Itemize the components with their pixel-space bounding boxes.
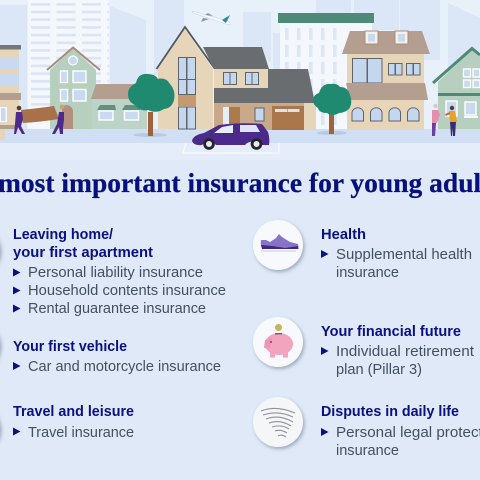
icon: piggy bank (253, 317, 303, 367)
list: disputes item: insurance (336, 443, 399, 459)
heading: leaving home (13, 226, 153, 261)
tree left (128, 74, 174, 137)
list: leaving home items: Personal liability insurance (28, 265, 203, 281)
illustration: street scene (0, 0, 480, 160)
tree right (313, 84, 351, 135)
list: leaving home items: Rental guarantee insurance (28, 301, 206, 317)
list: financial item (321, 344, 474, 378)
heading: leaving home: Leaving home/ (13, 226, 114, 243)
block: financial future (321, 323, 474, 378)
background skyline (0, 0, 480, 130)
airplane (192, 11, 231, 25)
heading: travel: Travel and leisure (13, 403, 134, 420)
heading: financial future: Your financial future (321, 323, 461, 340)
parking space (183, 143, 279, 153)
block: travel and leisure (13, 403, 134, 441)
list: vehicle item: Car and motorcycle insurance (28, 359, 221, 375)
heading: health: Health (321, 226, 366, 243)
car (192, 123, 269, 150)
block: first vehicle (13, 338, 221, 375)
green house right (433, 48, 480, 129)
sky (0, 0, 480, 143)
list: financial item: Individual retirement (336, 344, 474, 360)
heading: disputes: Disputes in daily life (321, 403, 459, 420)
list: health item: Supplemental health (336, 247, 472, 263)
icon: tornado (253, 397, 303, 447)
icon: running shoe (253, 220, 303, 270)
block: leaving home (13, 226, 226, 317)
list: health item: insurance (336, 265, 399, 281)
list: travel item: Travel insurance (28, 425, 134, 441)
heading: first vehicle: Your first vehicle (13, 338, 127, 355)
list: financial item: plan (Pillar 3) (336, 362, 422, 378)
main house (156, 27, 316, 130)
movers with sofa (14, 105, 64, 134)
white tower right (278, 13, 374, 129)
white tower left (28, 0, 109, 130)
list: disputes item (321, 425, 480, 459)
beige house (342, 31, 430, 130)
block: disputes (321, 403, 480, 459)
list: leaving home items (13, 265, 226, 317)
road (0, 129, 480, 143)
list: leaving home items: Household contents insurance (28, 283, 226, 299)
block: health (321, 226, 472, 281)
people talking (432, 104, 457, 136)
list: health item (321, 247, 472, 281)
heading: leaving home: your first apartment (13, 244, 153, 261)
apartment block left (0, 45, 21, 140)
green house left (47, 48, 147, 129)
